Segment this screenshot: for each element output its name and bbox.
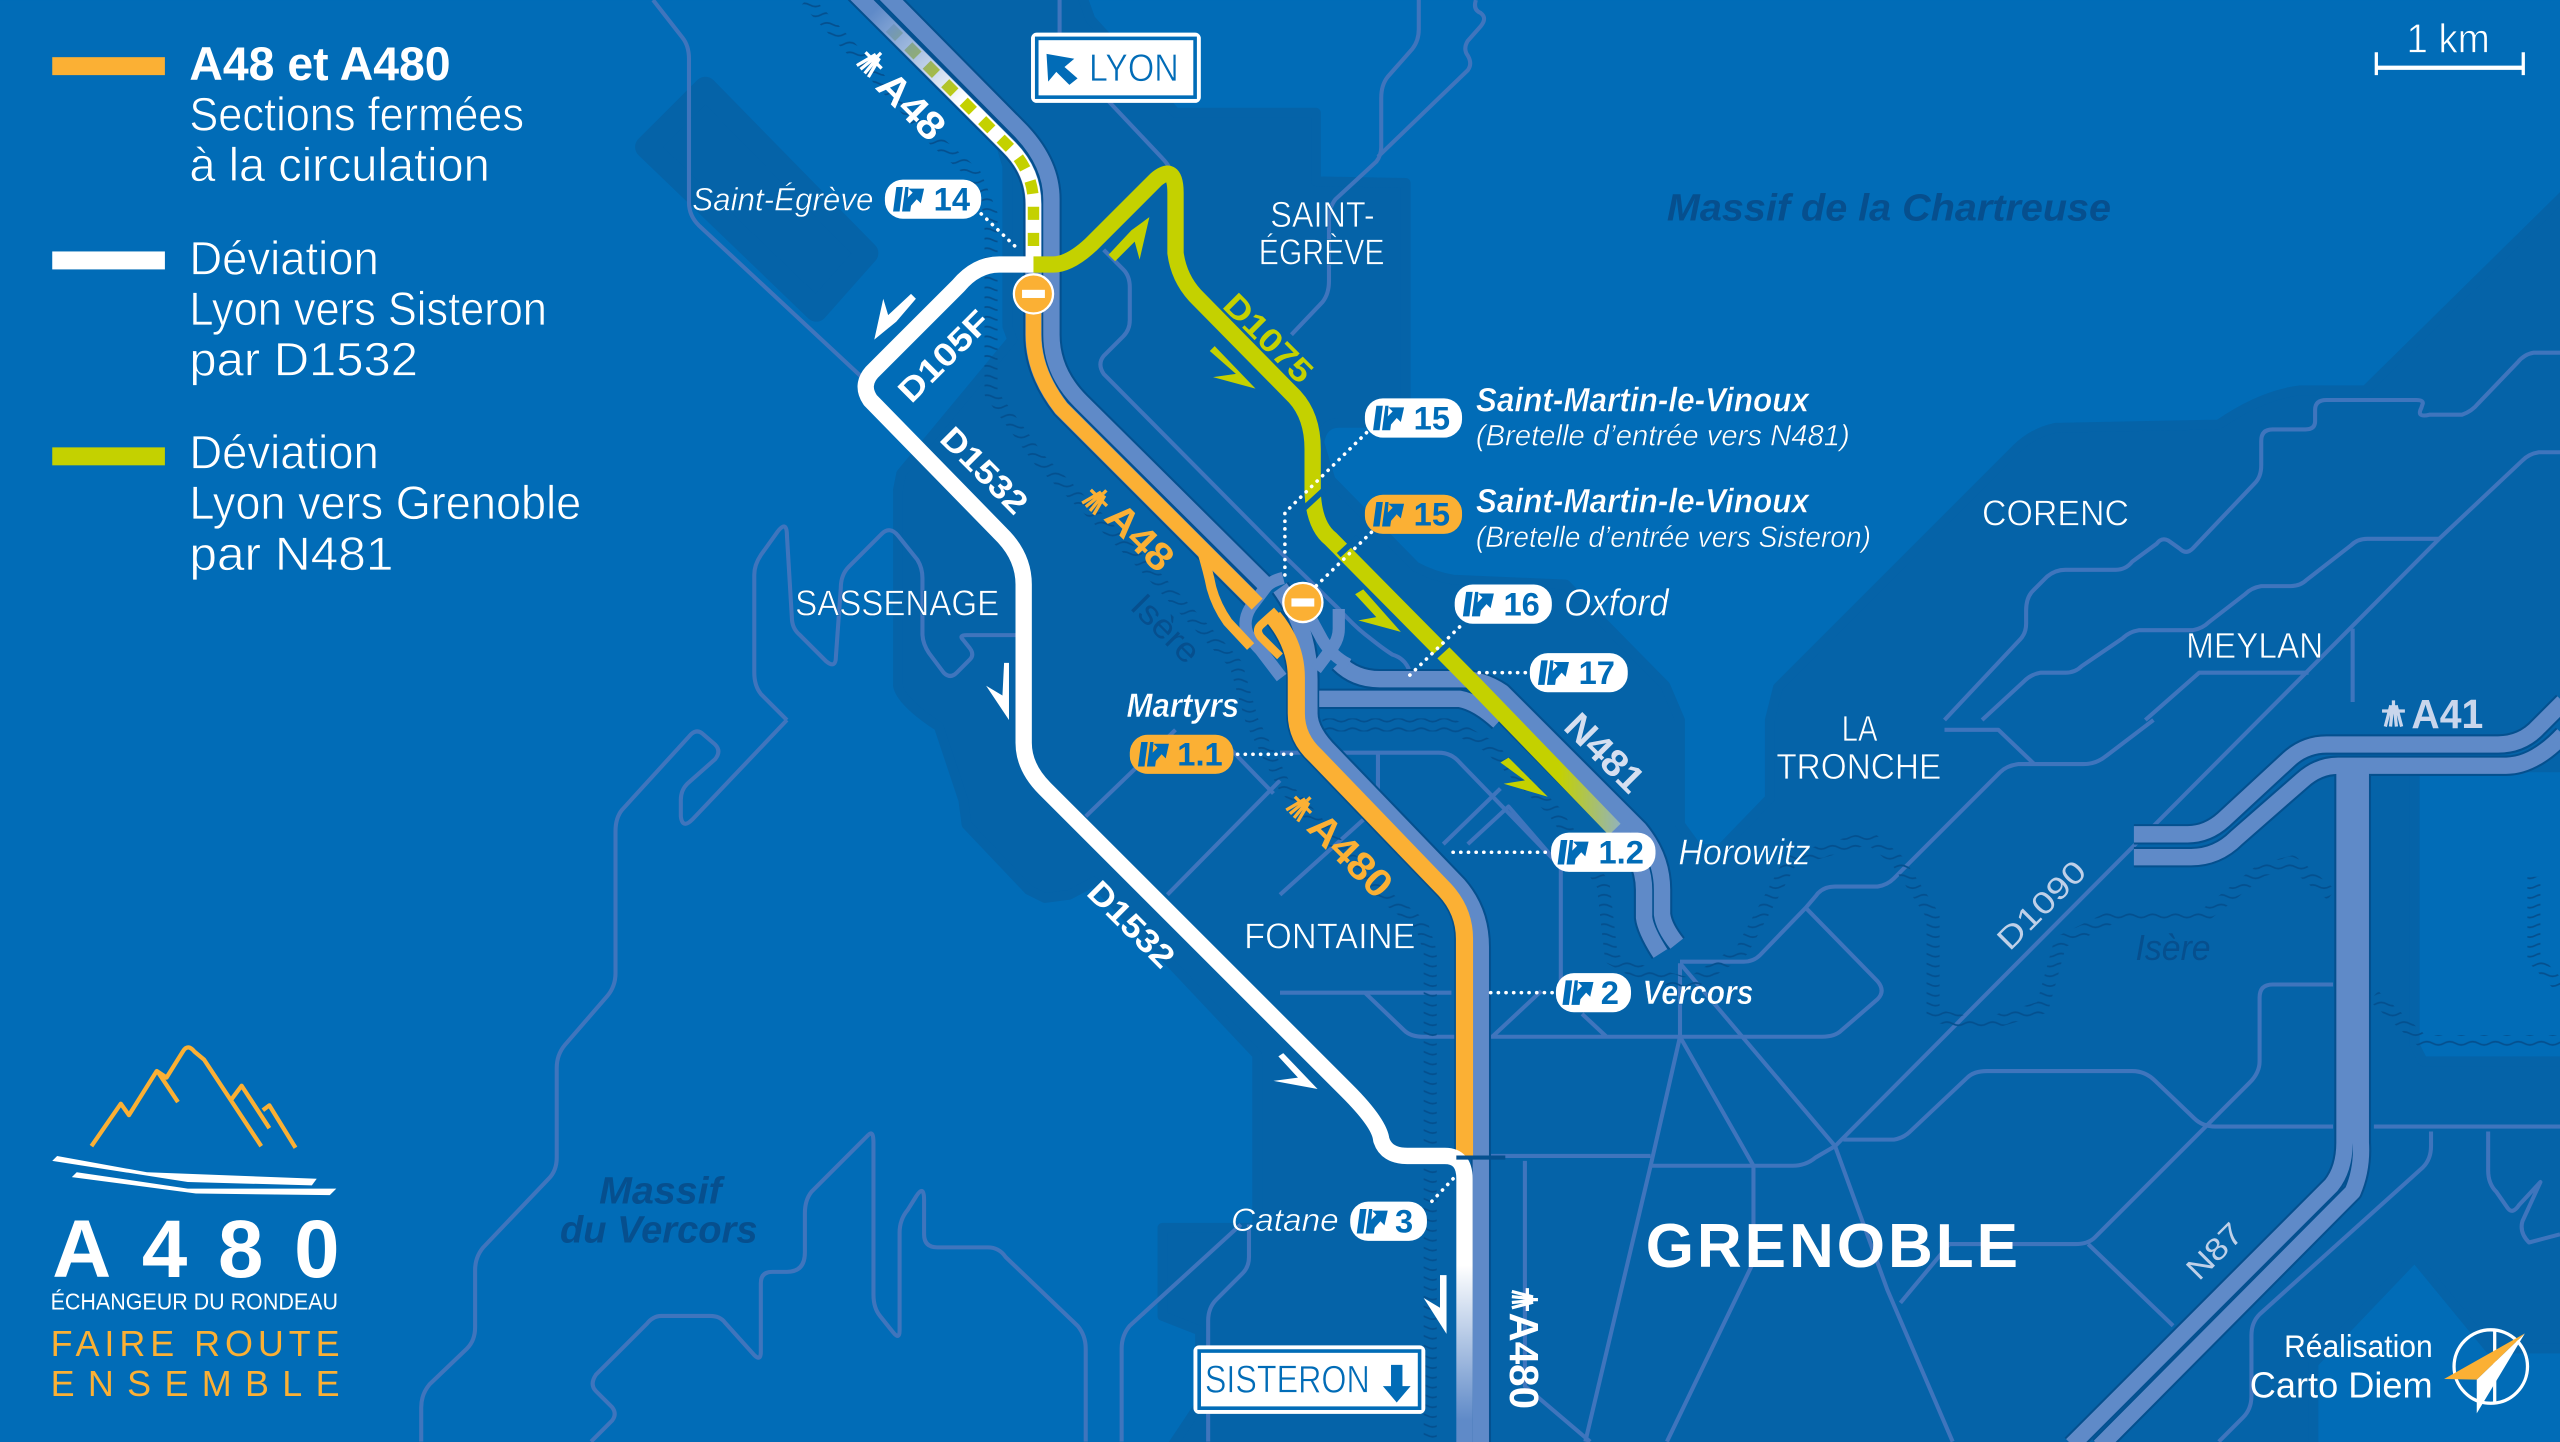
crossing gaps on green road [1303, 490, 1453, 658]
exit 2 [1556, 973, 1753, 1012]
exit 3 [1231, 1201, 1427, 1241]
massif names [560, 186, 2111, 1250]
road labels: D1090 [1990, 854, 2093, 957]
town names: ÉGRÈVE [1259, 232, 1384, 273]
town names: TRONCHE [1776, 746, 1941, 787]
white detour D105F D1532 [866, 265, 1464, 1442]
sign SISTERON: SISTERON [1205, 1359, 1370, 1402]
road labels: A480 [1299, 805, 1401, 907]
legend: A48 et A480 [189, 38, 451, 91]
exit 15 orange: 15 [1414, 496, 1450, 533]
town names: CORENC [1982, 493, 2129, 534]
exit 16: Oxford [1564, 582, 1670, 624]
exit 1.1: Martyrs [1127, 687, 1239, 725]
logo A480 [51, 1047, 340, 1404]
legend [52, 38, 581, 581]
exit 15 white: 15 [1414, 399, 1450, 436]
river Isère and Drac [807, 0, 2560, 1442]
legend: Déviation [189, 232, 379, 285]
road labels: A48 [868, 64, 954, 149]
no-entry signs [1014, 274, 1322, 622]
town names: LA [1842, 708, 1878, 749]
road labels: A41 [2411, 691, 2483, 737]
legend: Lyon vers Grenoble [189, 477, 581, 530]
road labels: D105F [890, 302, 997, 409]
road labels: D1532 [1080, 873, 1183, 975]
exit 2: Vercors [1642, 974, 1753, 1012]
dark tick at end of closed section [1456, 1156, 1505, 1159]
exit 1.2 [1551, 832, 1811, 873]
credit Carto Diem: Carto Diem [2250, 1365, 2433, 1406]
town names [795, 194, 2323, 1281]
valley urban area [865, 0, 2560, 1442]
legend: par D1532 [189, 334, 418, 387]
exit 1.1: 1.1 [1177, 736, 1223, 773]
town names: SASSENAGE [795, 583, 999, 624]
exit 17 [1530, 653, 1628, 692]
logo A480: FAIRE ROUTE [51, 1323, 340, 1364]
exit 14: 14 [934, 181, 970, 218]
exit 3: Catane [1231, 1201, 1339, 1238]
massif names: Massif [599, 1169, 725, 1211]
legend: Déviation [189, 427, 379, 480]
legend: Sections fermées [189, 89, 524, 142]
town names: FONTAINE [1244, 916, 1416, 957]
exit 1.2: Horowitz [1678, 832, 1811, 873]
exit 15 orange [1365, 483, 1871, 554]
road casing [854, 0, 2560, 1442]
exit 1.1 [1127, 687, 1239, 774]
scale bar [2376, 15, 2524, 75]
road labels: A480 [1501, 1313, 1547, 1409]
exit 16: 16 [1503, 586, 1540, 623]
closed section A48 A480 orange [1033, 310, 1464, 1156]
exit 15 orange: Saint-Martin-le-Vinoux [1476, 483, 1811, 521]
green detour D1075 N481 [1033, 174, 1615, 829]
massif patch [647, 88, 867, 310]
exit 15 white: Saint-Martin-le-Vinoux [1476, 381, 1811, 419]
exit 15 orange: (Bretelle d’entrée vers Sisteron) [1476, 521, 1871, 554]
scale bar: 1 km [2407, 15, 2490, 61]
logo A480: ÉCHANGEUR DU RONDEAU [51, 1288, 338, 1314]
massif names: du Vercors [560, 1208, 758, 1250]
road labels: D1532 [933, 419, 1036, 521]
legend: par N481 [189, 528, 393, 581]
town names: GRENOBLE [1646, 1212, 2018, 1281]
legend: à la circulation [189, 139, 490, 192]
logo A480: ENSEMBLE [51, 1363, 340, 1404]
exit 3: 3 [1395, 1203, 1413, 1240]
blue motorway carriageways [854, 0, 2560, 1442]
exit 14: Saint-Égrève [692, 181, 873, 218]
massif names: Massif de la Chartreuse [1667, 186, 2111, 228]
leader lines [981, 214, 1556, 1207]
exit 15 white [1365, 381, 1850, 453]
exit 2: 2 [1601, 974, 1619, 1011]
sign SISTERON [1193, 1345, 1425, 1414]
white A48 section with green dashes [862, 0, 1033, 269]
road labels [855, 45, 2483, 1409]
legend: Lyon vers Sisteron [189, 283, 547, 336]
exit 15 white: (Bretelle d’entrée vers N481) [1476, 420, 1850, 453]
town names: MEYLAN [2186, 625, 2323, 666]
sign LYON: LYON [1089, 47, 1179, 90]
credit Carto Diem [2250, 1329, 2528, 1413]
road labels: A48 [1096, 495, 1182, 580]
exit 17: 17 [1579, 654, 1615, 691]
road labels: N481 [1557, 704, 1653, 801]
road labels: N87 [2179, 1216, 2250, 1287]
road labels: D1075 [1216, 286, 1321, 390]
credit Carto Diem: Réalisation [2284, 1329, 2433, 1364]
exit 1.2: 1.2 [1599, 834, 1644, 871]
exit 16 [1455, 582, 1670, 624]
logo A480: A480 [52, 1204, 340, 1295]
road labels: Isère [2136, 927, 2211, 968]
direction arrows [874, 217, 1548, 1334]
town names: SAINT- [1270, 194, 1375, 235]
exit 14 [692, 180, 981, 219]
sign LYON [1031, 33, 1201, 103]
road labels: Isère [1123, 587, 1208, 671]
